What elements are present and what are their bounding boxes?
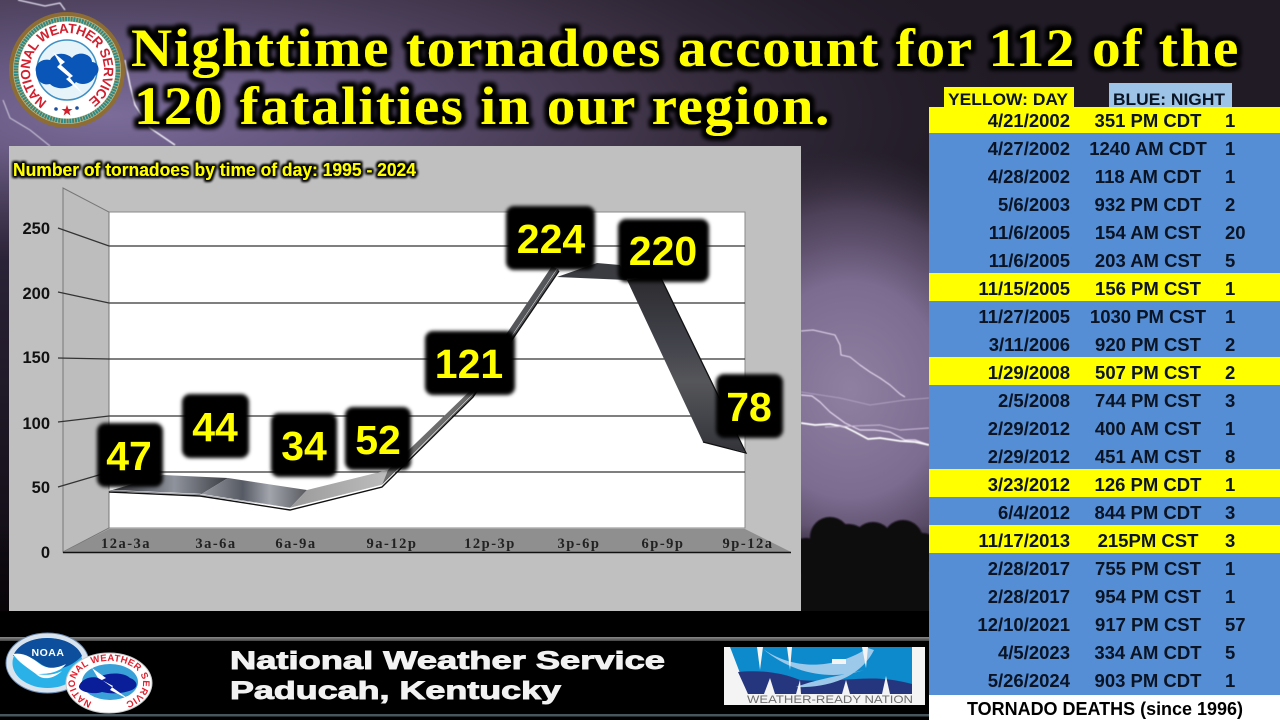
table rows: 11/27/2005 (978, 306, 1070, 327)
data label: 224 (506, 206, 595, 270)
table rows: 11/6/2005 (989, 250, 1070, 271)
x axis labels (101, 536, 773, 552)
y axis labels (22, 220, 50, 562)
x axis labels: 12p-3p (464, 536, 516, 552)
table rows: 903 PM CDT (1095, 670, 1202, 691)
table rows: 5 (1225, 250, 1235, 271)
side wall (63, 188, 109, 552)
table caption (929, 695, 1280, 720)
seal lettering: NATIONAL WEATHER SERVICE (20, 24, 114, 108)
panel: line chart of tornadoes by time of day (9, 146, 801, 611)
lightning bolts (3, 0, 929, 445)
x axis labels: 6a-9a (275, 536, 317, 552)
table rows: 744 PM CST (1095, 390, 1202, 411)
table rows: 334 AM CDT (1094, 642, 1202, 663)
table rows: 215PM CST (1098, 530, 1199, 551)
data label: 220: 220 (629, 228, 697, 274)
table rows: 1 (1225, 670, 1235, 691)
table rows: 920 PM CST (1095, 334, 1202, 355)
table rows: 118 AM CDT (1095, 166, 1202, 187)
y axis labels: 100 (22, 415, 50, 433)
x axis labels: 6p-9p (642, 536, 684, 552)
table caption: TORNADO DEATHS (since 1996) (967, 698, 1243, 719)
title: 120 fatalities in our region. (134, 76, 831, 136)
data label: 52 (345, 407, 411, 470)
table rows: 4/21/2002 (988, 110, 1070, 131)
table rows: 3/23/2012 (988, 474, 1070, 495)
table rows: 755 PM CST (1095, 558, 1202, 579)
data label: 224: 224 (517, 216, 585, 262)
table rows: 8 (1225, 446, 1235, 467)
table rows: 11/6/2005 (989, 222, 1070, 243)
table rows: 451 AM CST (1095, 446, 1202, 467)
table rows: 12/10/2021 (977, 614, 1070, 635)
legend: blue night (1109, 83, 1232, 109)
table rows: 5/6/2003 (998, 194, 1070, 215)
table rows: 20 (1225, 222, 1246, 243)
data label: 78 (716, 374, 783, 438)
table rows: 1030 PM CST (1090, 306, 1207, 327)
table rows: 1 (1225, 418, 1235, 439)
x axis labels: 3p-6p (558, 536, 600, 552)
table rows: 1 (1225, 474, 1235, 495)
data label: 52: 52 (355, 417, 401, 463)
table rows: 1 (1225, 306, 1235, 327)
table rows: 156 PM CST (1095, 278, 1202, 299)
table rows (977, 110, 1246, 691)
table rows: 126 PM CDT (1095, 474, 1202, 495)
data label: 34: 34 (281, 423, 327, 469)
table rows: 2 (1225, 334, 1235, 355)
chart title: Number of tornadoes by time of day: 1995 - 2024 (13, 160, 416, 180)
table rows: 3/11/2006 (989, 334, 1070, 355)
plot back wall (109, 212, 745, 528)
table rows: 400 AM CST (1095, 418, 1202, 439)
table rows: 2/29/2012 (988, 418, 1070, 439)
x axis labels: 9a-12p (367, 536, 417, 552)
data label: 78: 78 (726, 384, 772, 430)
table rows: 6/4/2012 (998, 502, 1070, 523)
logo: Weather-Ready Nation (724, 647, 925, 706)
table: tornado deaths since 1996 (929, 107, 1280, 720)
table rows: 154 AM CST (1095, 222, 1202, 243)
table rows: 11/15/2005 (978, 278, 1070, 299)
title (131, 18, 1240, 136)
logo: NOAA (6, 633, 89, 693)
table rows: 1 (1225, 278, 1235, 299)
y axis labels: 50 (32, 479, 50, 497)
table rows: 4/5/2023 (998, 642, 1070, 663)
footer band (0, 611, 929, 720)
table rows: 2/28/2017 (988, 586, 1070, 607)
data label: 220 (618, 219, 709, 282)
table rows: 2/5/2008 (998, 390, 1070, 411)
table rows: 3 (1225, 502, 1235, 523)
tree silhouettes (788, 517, 942, 637)
logo: National Weather Service seal (9, 12, 125, 128)
logo: NOAA: NOAA (32, 647, 64, 659)
table rows: 1240 AM CDT (1089, 138, 1207, 159)
legend: yellow day: YELLOW: DAY (948, 91, 1068, 109)
table rows: 1/29/2008 (988, 362, 1070, 383)
y axis labels: 200 (22, 285, 50, 303)
data label: 121 (425, 331, 515, 395)
table rows: 203 AM CST (1095, 250, 1202, 271)
y axis labels: 0 (41, 544, 50, 562)
table rows: 932 PM CDT (1095, 194, 1202, 215)
table rows: 2/29/2012 (988, 446, 1070, 467)
table rows: 1 (1225, 138, 1235, 159)
legend: blue night: BLUE: NIGHT (1113, 91, 1225, 109)
table rows: 844 PM CDT (1095, 502, 1202, 523)
table rows: 507 PM CST (1095, 362, 1202, 383)
x axis labels: 9p-12a (723, 536, 773, 552)
x axis labels: 12a-3a (101, 536, 151, 552)
table rows: 351 PM CDT (1095, 110, 1202, 131)
logo: Weather-Ready Nation: WEATHER-READY NATION (747, 694, 913, 706)
data label: 47 (97, 423, 163, 487)
data label: 121: 121 (435, 341, 503, 387)
table rows: 1 (1225, 586, 1235, 607)
data label: 34 (271, 413, 337, 477)
title: Nighttime tornadoes account for 112 of the (131, 18, 1240, 78)
table rows: 2 (1225, 362, 1235, 383)
x axis labels: 3a-6a (195, 536, 237, 552)
y axis labels: 150 (22, 349, 50, 367)
chart floor (63, 529, 791, 552)
footer office name (230, 647, 665, 705)
table rows: 1 (1225, 166, 1235, 187)
footer office name: National Weather Service (230, 647, 665, 675)
3D ribbon data line (108, 263, 746, 510)
table rows: 5/26/2024 (988, 670, 1071, 691)
table rows: 1 (1225, 558, 1235, 579)
gridlines (58, 228, 745, 487)
logo: National Weather Service small (66, 652, 152, 714)
table rows: 3 (1225, 390, 1235, 411)
table rows: 917 PM CST (1095, 614, 1202, 635)
table rows: 4/28/2002 (988, 166, 1070, 187)
table rows: 4/27/2002 (988, 138, 1070, 159)
table rows: 11/17/2013 (978, 530, 1070, 551)
table rows: 57 (1225, 614, 1246, 635)
table rows: 2/28/2017 (988, 558, 1070, 579)
footer office name: Paducah, Kentucky (230, 677, 561, 705)
table rows: 2 (1225, 194, 1235, 215)
data label: 47: 47 (106, 433, 152, 479)
data label: 44: 44 (192, 404, 238, 450)
data label: 44 (182, 394, 249, 458)
y axis labels: 250 (22, 220, 50, 238)
table rows: 954 PM CST (1095, 586, 1202, 607)
table rows: 3 (1225, 530, 1235, 551)
table rows: 1 (1225, 110, 1235, 131)
table rows: 5 (1225, 642, 1235, 663)
